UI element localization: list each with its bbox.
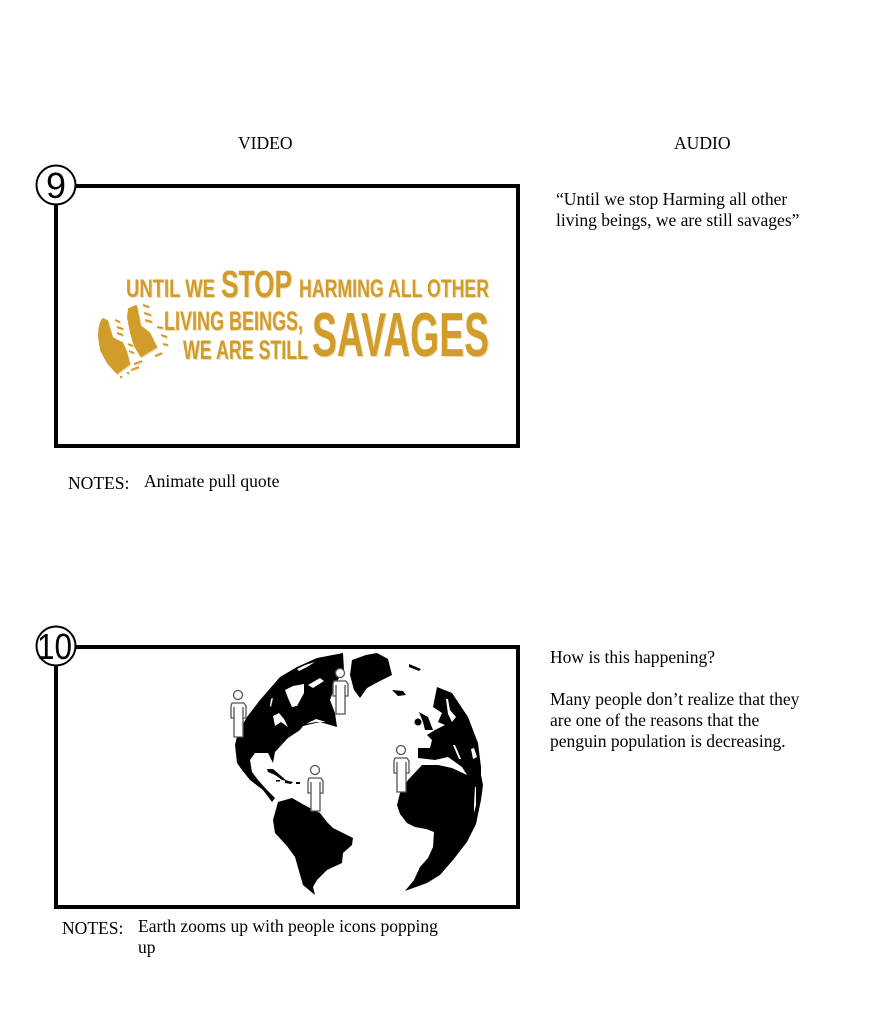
iceland xyxy=(392,690,406,696)
hudson bay and arctic gaps xyxy=(270,662,326,727)
audio text 9: living beings, we are still savages” xyxy=(556,210,799,230)
person icon: africa xyxy=(394,746,409,792)
ireland xyxy=(414,718,422,726)
panel 10: video frame xyxy=(56,647,518,907)
quote word: savages: SAVAGES xyxy=(312,301,489,370)
united kingdom xyxy=(419,712,433,730)
globe xyxy=(235,653,483,895)
audio text 10: penguin population is decreasing. xyxy=(550,731,786,751)
notes text 10 xyxy=(138,916,438,957)
badge: number 10: 10 xyxy=(37,626,72,667)
notes label 9: NOTES: xyxy=(68,473,129,493)
africa xyxy=(397,765,483,891)
caribbean islands xyxy=(267,769,300,784)
quote line: we are still: WE ARE STILL xyxy=(183,335,308,365)
greenland xyxy=(350,653,392,698)
badge: number 9: 9 xyxy=(46,165,66,206)
person icon: greenland xyxy=(333,668,348,714)
heading: video column: VIDEO xyxy=(238,133,293,153)
notes text 10: up xyxy=(138,937,156,957)
audio text 9 xyxy=(556,189,799,230)
south america xyxy=(273,798,353,895)
audio text 9: “Until we stop Harming all other xyxy=(556,189,787,209)
pull quote xyxy=(99,264,489,377)
audio text 10: How is this happening? xyxy=(550,647,715,667)
quote word: stop: STOP xyxy=(221,264,292,306)
audio text 10: Many people don’t realize that they xyxy=(550,689,800,709)
person icon: north america west xyxy=(231,690,246,737)
baltic, adriatic and black sea gaps xyxy=(446,699,477,759)
audio text 10 xyxy=(550,647,800,751)
panel 9: video frame xyxy=(56,186,518,446)
audio text 10: are one of the reasons that the xyxy=(550,710,760,730)
heading: audio column: AUDIO xyxy=(674,133,730,153)
badge: number 9 xyxy=(36,165,76,206)
madagascar gap xyxy=(474,787,476,813)
north america xyxy=(235,653,344,802)
quote line: until we: UNTIL WE xyxy=(126,275,215,303)
notes text 9: Animate pull quote xyxy=(144,471,280,491)
quote line: living beings: LIVING BEINGS, xyxy=(164,306,303,336)
europe xyxy=(418,687,481,775)
notes label 10: NOTES: xyxy=(62,918,123,938)
svalbard xyxy=(409,664,421,671)
icon: footprints xyxy=(99,305,168,377)
quote line: harming all other: HARMING ALL OTHER xyxy=(299,275,489,303)
notes text 10: Earth zooms up with people icons popping xyxy=(138,916,438,936)
person icon: south america xyxy=(308,766,323,811)
